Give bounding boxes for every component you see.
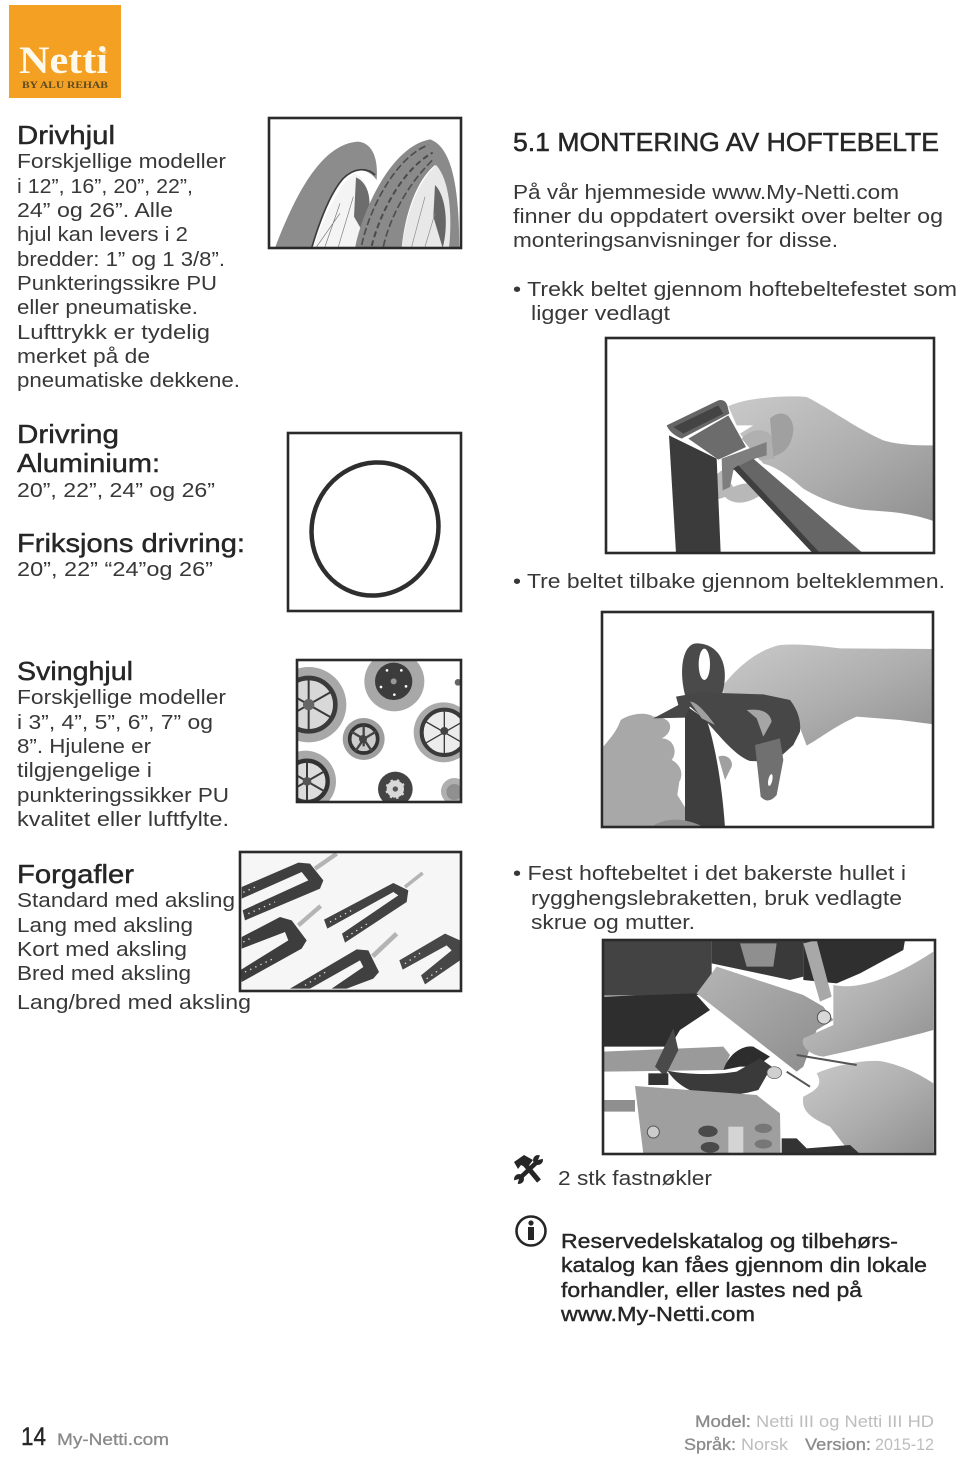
text block: Drivhjul: bredder: 1” og 1 3/8”. bbox=[17, 248, 225, 271]
heading: section 5.1: 5.1 MONTERING AV HOFTEBELTE bbox=[513, 127, 939, 157]
text block: Drivhjul bbox=[17, 120, 240, 392]
text block: Friksjons drivring: 20”, 22” “24”og 26” bbox=[17, 558, 213, 581]
text block: Drivhjul: Drivhjul bbox=[17, 120, 115, 150]
bullet: step 3: rygghengslebraketten, bruk vedlagte bbox=[531, 887, 902, 910]
footer: model, language and version: Norsk bbox=[741, 1435, 789, 1454]
footer: model, language and version bbox=[684, 1412, 934, 1454]
photo: push ring bbox=[288, 433, 461, 614]
text block: intro: monteringsanvisninger for disse. bbox=[513, 229, 838, 252]
footer: model, language and version: Språk: bbox=[684, 1435, 736, 1454]
text block: Forgafler: Bred med aksling bbox=[17, 962, 191, 985]
text block: intro: På vår hjemmeside www.My-Netti.com bbox=[513, 181, 899, 204]
icon: tools bbox=[512, 1153, 546, 1186]
footer: model, language and version: Version: bbox=[805, 1435, 871, 1454]
text block: Forgafler: Standard med aksling bbox=[17, 889, 235, 912]
text block: Forgafler: Forgafler bbox=[17, 859, 134, 889]
bullet: step 1: • Trekk beltet gjennom hoftebeltefestet som bbox=[513, 278, 957, 301]
text block: Drivhjul: i 12”, 16”, 20”, 22”, bbox=[17, 175, 193, 198]
tools text: 2 stk fastnøkler bbox=[558, 1167, 712, 1190]
logo: Netti by Alu Rehab: ® bbox=[102, 49, 107, 56]
bullet: step 3: • Fest hoftebeltet i det bakerste hullet i bbox=[513, 862, 906, 885]
callout: spare parts catalogue: forhandler, eller lastes ned på bbox=[561, 1279, 863, 1302]
footer: model, language and version: Netti III og Netti III HD bbox=[756, 1412, 934, 1431]
footer: page number and website: My-Netti.com bbox=[57, 1430, 169, 1449]
photo: belt through buckle bbox=[606, 338, 934, 553]
callout: spare parts catalogue bbox=[560, 1230, 927, 1326]
logo: Netti by Alu Rehab: Netti bbox=[19, 39, 108, 82]
text block: intro bbox=[513, 181, 943, 252]
text block: Drivring Aluminium bbox=[17, 419, 215, 502]
text block: Forgafler: Lang med aksling bbox=[17, 914, 193, 937]
text block: Drivhjul: eller pneumatiske. bbox=[17, 296, 198, 319]
text block: Svinghjul: kvalitet eller luftfylte. bbox=[17, 808, 229, 831]
text block: Friksjons drivring bbox=[17, 528, 245, 581]
text block: Forgafler: Kort med aksling bbox=[17, 938, 187, 961]
text block: Friksjons drivring: Friksjons drivring: bbox=[17, 528, 245, 558]
text block: Svinghjul: Forskjellige modeller bbox=[17, 686, 226, 709]
text block: Drivring Aluminium: 20”, 22”, 24” og 26” bbox=[17, 479, 215, 502]
photo: two tyres bbox=[269, 118, 461, 248]
footer: page number and website bbox=[21, 1423, 169, 1451]
text block: Svinghjul: Svinghjul bbox=[17, 656, 133, 686]
bullet: step 3: skrue og mutter. bbox=[531, 911, 695, 934]
photo: caster wheels bbox=[271, 651, 474, 812]
callout: spare parts catalogue: Reservedelskatalog og tilbehørs- bbox=[561, 1230, 898, 1253]
text block: Drivhjul: Punkteringssikre PU bbox=[17, 272, 217, 295]
text block: Drivhjul: merket på de bbox=[17, 345, 150, 368]
text block: Drivring Aluminium: Drivring bbox=[17, 419, 119, 449]
callout: spare parts catalogue: www.My-Netti.com bbox=[560, 1303, 755, 1326]
text block: Svinghjul: tilgjengelige i bbox=[17, 759, 152, 782]
callout: spare parts catalogue: katalog kan fåes gjennom din lokale bbox=[561, 1254, 927, 1277]
footer: model, language and version: Model: bbox=[695, 1412, 751, 1431]
bullet: step 2: • Tre beltet tilbake gjennom belteklemmen. bbox=[513, 570, 945, 593]
text block: Drivhjul: hjul kan levers i 2 bbox=[17, 223, 188, 246]
photo: belt in hands bbox=[602, 612, 933, 828]
text block: Svinghjul: 8”. Hjulene er bbox=[17, 735, 151, 758]
bullet: step 3 bbox=[513, 862, 906, 934]
text block: Svinghjul: punkteringssikker PU bbox=[17, 784, 229, 807]
photo: fork variants bbox=[239, 851, 461, 991]
text block: Forgafler: Lang/bred med aksling bbox=[17, 991, 251, 1014]
icon: information bbox=[516, 1216, 546, 1246]
text block: Drivhjul: Lufttrykk er tydelig bbox=[17, 321, 210, 344]
bullet: step 1 bbox=[513, 278, 957, 325]
text block: Drivhjul: pneumatiske dekkene. bbox=[17, 369, 240, 392]
text block: intro: finner du oppdatert oversikt over belter og bbox=[513, 205, 943, 228]
logo: Netti by Alu Rehab: BY ALU REHAB bbox=[22, 81, 109, 91]
text block: Drivhjul: Forskjellige modeller bbox=[17, 150, 226, 173]
footer: model, language and version: 2015-12 bbox=[875, 1435, 934, 1454]
footer: page number and website: 14 bbox=[21, 1423, 46, 1451]
text block: Drivhjul: 24” og 26”. Alle bbox=[17, 199, 173, 222]
text block: Svinghjul bbox=[17, 656, 229, 831]
text block: Drivring Aluminium: Aluminium: bbox=[17, 448, 160, 478]
text block: Forgafler bbox=[17, 859, 251, 1014]
text block: Svinghjul: i 3”, 4”, 5”, 6”, 7” og bbox=[17, 711, 213, 734]
bullet: step 1: ligger vedlagt bbox=[531, 302, 670, 325]
photo: fastening belt to bracket bbox=[603, 940, 935, 1154]
logo: Netti by Alu Rehab bbox=[9, 5, 121, 98]
